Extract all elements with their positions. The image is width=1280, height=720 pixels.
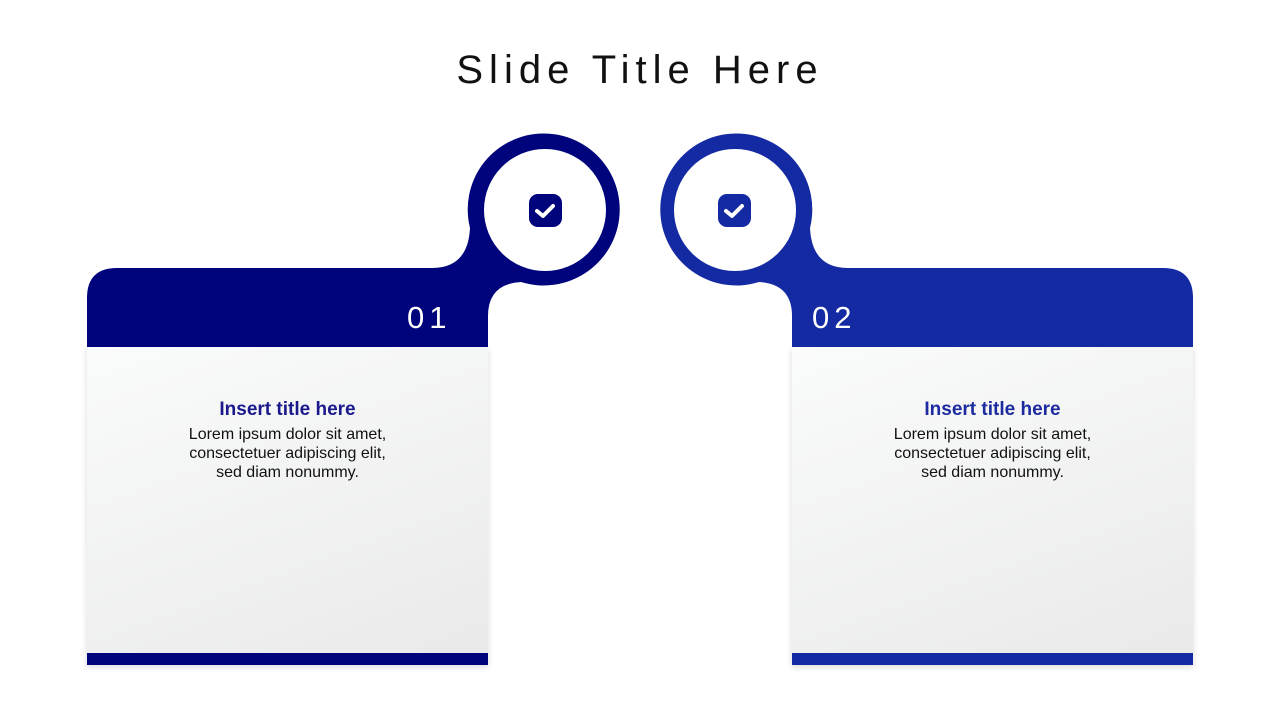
card 1 text: Insert title here: [219, 399, 356, 420]
card 2: [792, 347, 1193, 665]
card 1 text: [189, 399, 386, 481]
header 2 with ring: [660, 133, 1193, 347]
card 1: [87, 347, 488, 665]
header 1 with ring: [87, 133, 620, 347]
card 2 text: sed diam nonummy.: [921, 464, 1064, 481]
number 01: 01: [407, 300, 451, 335]
card 2 text: [894, 399, 1091, 481]
card 2 bottom bar: [792, 653, 1193, 665]
card 2 text: Lorem ipsum dolor sit amet,: [894, 426, 1091, 443]
card 1 text: sed diam nonummy.: [216, 464, 359, 481]
title: Slide Title Here: [456, 48, 824, 92]
card 1 text: Lorem ipsum dolor sit amet,: [189, 426, 386, 443]
card 1 bottom bar: [87, 653, 488, 665]
icon: check 1: [529, 194, 562, 227]
icon: check 2: [718, 194, 751, 227]
number 02: 02: [812, 300, 856, 335]
card 2 text: Insert title here: [924, 399, 1061, 420]
card 1 text: consectetuer adipiscing elit,: [189, 445, 386, 462]
card 2 text: consectetuer adipiscing elit,: [894, 445, 1091, 462]
